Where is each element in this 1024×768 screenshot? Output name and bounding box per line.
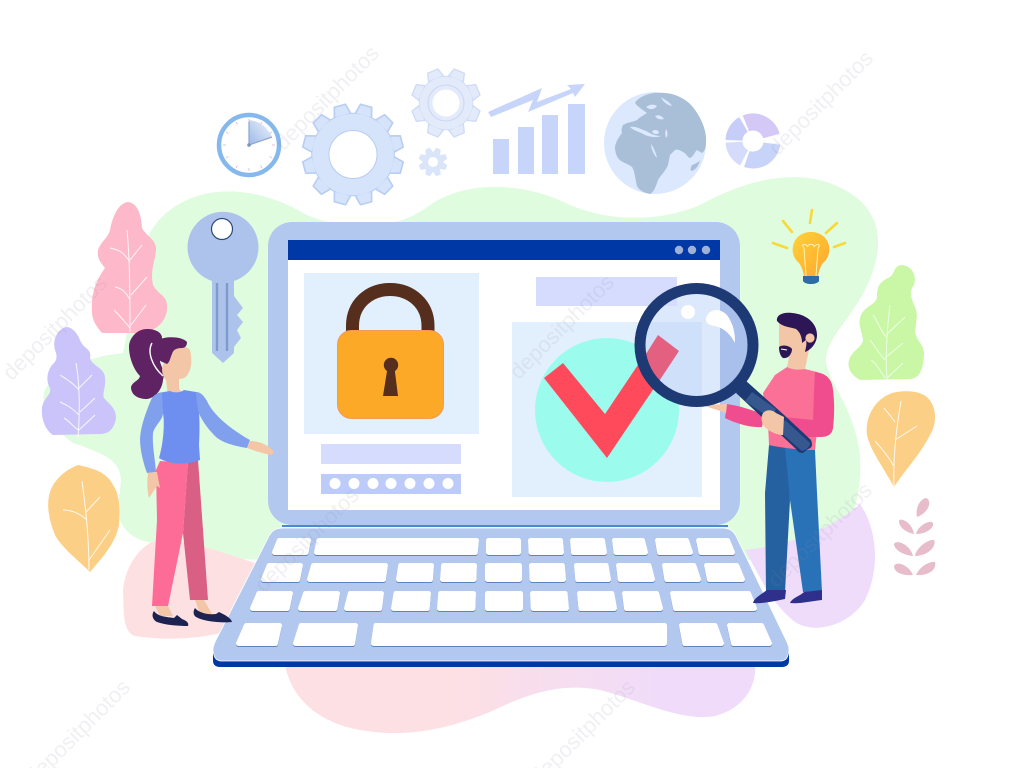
laptop	[213, 222, 789, 667]
man: right leg	[783, 447, 822, 592]
panel: padlock	[304, 273, 479, 434]
magnifier: ring	[640, 288, 753, 402]
icon: globe	[604, 92, 706, 194]
watermarks: depositphotos	[762, 477, 877, 592]
icon: light bulb	[773, 210, 845, 284]
leaf: orange right	[867, 391, 935, 487]
window title bar	[288, 240, 720, 260]
laptop: keyboard base	[213, 528, 789, 667]
magnifier: lens	[646, 294, 748, 396]
icon: medium gear	[411, 68, 481, 138]
background blob: bottom	[285, 664, 755, 733]
chart: donut	[734, 122, 772, 160]
icon: small gear	[419, 148, 447, 176]
woman: right arm	[196, 392, 250, 448]
icon: large gear	[302, 104, 404, 205]
man: torso	[763, 367, 820, 450]
person: man	[620, 277, 834, 603]
watermarks: depositphotos	[269, 40, 384, 155]
woman: neck and face	[162, 346, 191, 396]
woman: front leg	[152, 461, 188, 606]
man: left leg	[765, 445, 790, 592]
watermarks: depositphotos	[249, 482, 364, 597]
header bar: right column	[536, 277, 677, 306]
leaf: green right	[848, 265, 924, 380]
leaf: yellow left	[48, 465, 119, 572]
woman: left hand	[147, 472, 160, 498]
watermarks: depositphotos	[504, 269, 619, 384]
woman: back leg	[183, 460, 208, 600]
woman: torso	[158, 390, 200, 464]
login field	[321, 444, 461, 464]
man: ear	[805, 333, 815, 343]
magnifier: highlights	[681, 305, 735, 343]
woman: hair tie	[150, 343, 163, 376]
laptop: screen bezel	[268, 222, 740, 525]
panel: check mark	[512, 322, 702, 497]
keyboard keys	[238, 540, 770, 644]
woman: ponytail	[129, 329, 164, 399]
background blob: pink left	[123, 541, 255, 639]
magnifier: grip highlight	[745, 392, 810, 451]
woman: right hand	[247, 441, 274, 455]
icon: clock	[219, 115, 279, 175]
laptop: screen hinge line	[282, 525, 728, 527]
man: hair	[777, 313, 817, 352]
icon: key	[188, 212, 258, 363]
magnifier: handle	[736, 380, 812, 453]
leaf: purple	[42, 327, 116, 438]
woman: left arm	[140, 393, 163, 473]
leaf: pink	[92, 202, 167, 333]
person: woman	[129, 329, 274, 626]
icon: magnifying glass	[634, 283, 812, 453]
sprig: small pink leaves	[894, 498, 935, 575]
chart: growth bars and arrow	[488, 84, 585, 174]
icon: padlock	[338, 290, 444, 418]
man: neck and face	[779, 322, 809, 372]
background blob: green	[43, 177, 878, 560]
man: right hand	[762, 410, 784, 435]
password field	[321, 474, 461, 494]
man: left palm	[703, 404, 727, 413]
watermarks: depositphotos	[0, 270, 112, 385]
man: left sleeve	[725, 404, 764, 427]
man: right sleeve	[783, 372, 834, 437]
woman: shoes	[153, 608, 232, 626]
background blob: lavender right	[745, 504, 875, 628]
woman: ankles	[155, 600, 212, 616]
watermarks: depositphotos	[763, 45, 878, 160]
man: beard	[779, 346, 792, 358]
woman: head hair	[158, 337, 187, 364]
laptop: screen display	[288, 260, 720, 510]
man: shoes	[753, 590, 822, 603]
